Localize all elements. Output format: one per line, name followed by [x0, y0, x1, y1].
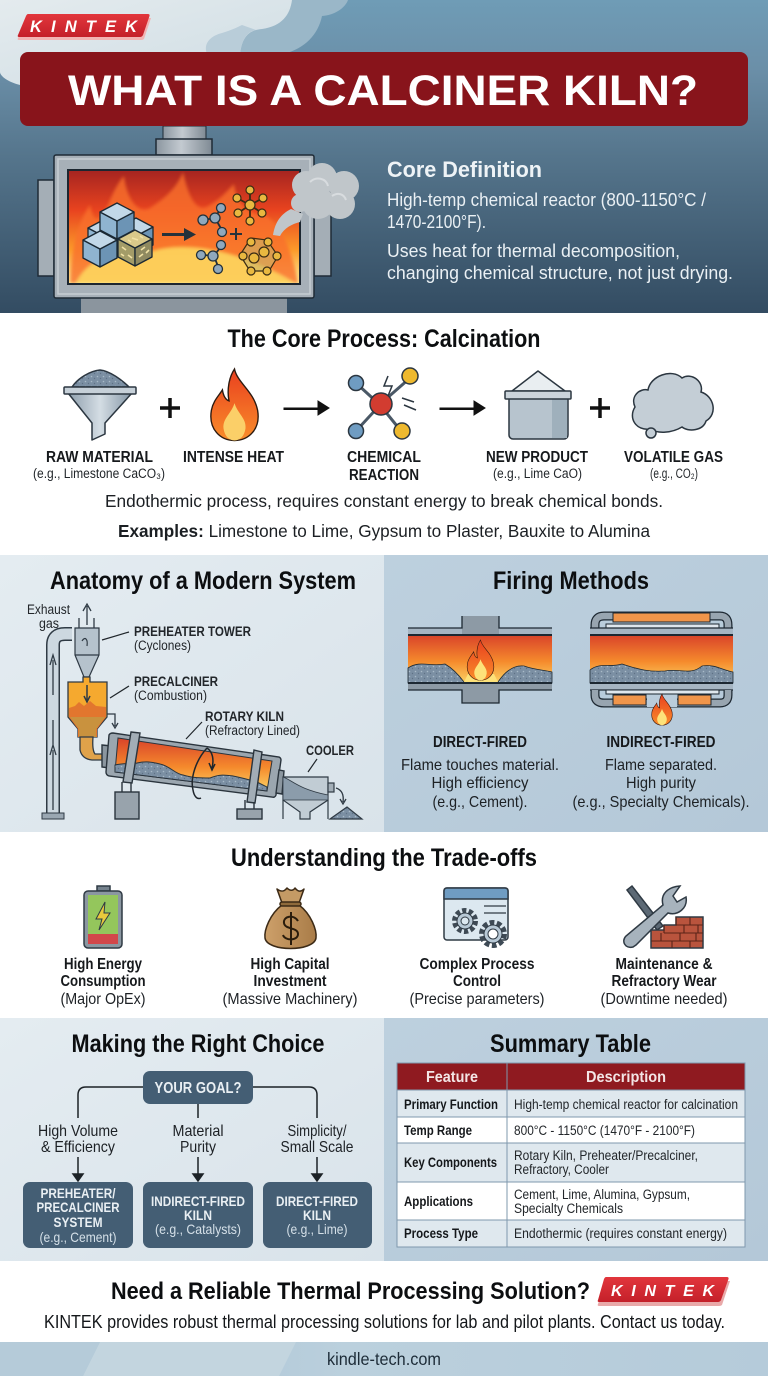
label: precalciner: (Combustion) [134, 688, 207, 703]
result: preheater: PREHEATER/ [40, 1185, 116, 1201]
table: Specialty Chemicals [514, 1201, 623, 1216]
heading: summary table: Summary Table [490, 1030, 651, 1058]
title banner: WHAT IS A CALCINER KILN? [68, 67, 698, 115]
result: preheater: PRECALCINER [36, 1199, 120, 1215]
label: cooler: COOLER [306, 743, 354, 758]
table [397, 1063, 745, 1247]
result: direct: (e.g., Lime) [286, 1221, 348, 1237]
label: volatile gas: VOLATILE GAS [624, 449, 723, 466]
arrow [440, 401, 485, 415]
table: Feature [426, 1069, 478, 1086]
result: preheater [23, 1182, 133, 1248]
label: material purity: Purity [180, 1139, 216, 1156]
table: Rotary Kiln, Preheater/Precalciner, [514, 1148, 698, 1163]
label: high capital: Investment [254, 973, 327, 990]
result: direct: DIRECT-FIRED [276, 1193, 358, 1209]
connectors [78, 1087, 317, 1118]
panel: firing methods [384, 555, 768, 832]
diagram: rotary kiln [102, 732, 284, 819]
result: direct: KILN [303, 1207, 331, 1223]
leader lines [102, 632, 317, 772]
logo: KINTEK: KINTEK [611, 1283, 715, 1300]
label: rotary kiln: ROTARY KILN [205, 709, 284, 724]
table: Primary Function [404, 1097, 498, 1112]
icon: raw material funnel [64, 370, 136, 440]
arrows [73, 1157, 322, 1181]
label: exhaust gas [27, 602, 70, 631]
panel: trade-offs [0, 832, 768, 1018]
label: raw material: RAW MATERIAL [46, 449, 153, 466]
label: complex process: (Precise parameters) [410, 991, 544, 1008]
title banner [20, 52, 748, 126]
table: Applications [404, 1194, 473, 1209]
label: maintenance: Refractory Wear [612, 973, 716, 990]
label: simplicity: Simplicity/ [288, 1123, 347, 1140]
label: material purity: Material [172, 1123, 224, 1140]
text: endothermic note: Endothermic process, requires constant energy to break chemical bonds. [105, 491, 663, 511]
panel: footer [0, 1342, 768, 1376]
label: volatile gas [624, 449, 723, 481]
table: Key Components [404, 1155, 497, 1170]
label: high energy: Consumption [60, 973, 146, 990]
label: intense heat: INTENSE HEAT [183, 449, 284, 466]
label: high volume [38, 1123, 118, 1156]
operator: plus [160, 398, 180, 418]
result: preheater: SYSTEM [54, 1214, 102, 1230]
logo: KINTEK top [18, 14, 151, 40]
logo: KINTEK [598, 1277, 730, 1306]
result: indirect [143, 1182, 253, 1248]
table: Endothermic (requires constant energy) [514, 1226, 727, 1241]
label: new product: (e.g., Lime CaO) [493, 466, 582, 481]
heading: right choice: Making the Right Choice [72, 1030, 325, 1058]
label: complex process: Control [453, 973, 501, 990]
text block: core definition: Uses heat for thermal decomposition, [387, 241, 680, 261]
text: indirect-fired [572, 734, 750, 811]
result: indirect: INDIRECT-FIRED [151, 1193, 245, 1209]
text: examples: Examples: Limestone to Lime, Gypsum to Plaster, Bauxite to Alumina [118, 521, 650, 541]
icon: chemical reaction molecule [348, 368, 418, 439]
table: Refractory, Cooler [514, 1162, 609, 1177]
icon: new product container [505, 371, 571, 439]
label: complex process [410, 956, 544, 1008]
text: indirect-fired: High purity [626, 775, 696, 792]
icon: blue molecules [196, 204, 226, 274]
label: raw material: (e.g., Limestone CaCO₃) [33, 466, 165, 481]
text: website: kindle-tech.com [327, 1349, 441, 1369]
label: precalciner [134, 674, 218, 703]
diagram: precalciner [68, 677, 118, 760]
kiln illustration [38, 126, 359, 313]
label: new product: NEW PRODUCT [486, 449, 588, 466]
diagram: indirect-fired [590, 613, 733, 725]
diagram: exhaust pipe [42, 604, 94, 819]
label: maintenance [600, 956, 728, 1008]
result: preheater: (e.g., Cement) [40, 1229, 116, 1245]
icon: stone cubes [83, 203, 153, 267]
label: simplicity [280, 1123, 354, 1156]
text: direct-fired: High efficiency [432, 775, 528, 792]
label: material purity [172, 1123, 224, 1156]
label: exhaust gas: Exhaust [27, 602, 70, 617]
icon: tools and bricks [624, 886, 703, 948]
decision: your goal: YOUR GOAL? [154, 1080, 242, 1097]
label: maintenance: Maintenance & [616, 956, 713, 973]
result: indirect: KILN [184, 1207, 212, 1223]
icon: process arrow [162, 228, 196, 241]
label: high energy [60, 956, 146, 1008]
result: indirect: (e.g., Catalysts) [155, 1221, 241, 1237]
table: Cement, Lime, Alumina, Gypsum, [514, 1187, 690, 1202]
heading: firing methods: Firing Methods [493, 567, 649, 595]
label: high energy: High Energy [64, 956, 142, 973]
label: preheater tower [134, 624, 251, 653]
label: high capital [222, 956, 358, 1008]
label: chemical reaction: REACTION [349, 467, 419, 484]
table: Temp Range [404, 1123, 472, 1138]
text: indirect-fired: INDIRECT-FIRED [606, 734, 716, 751]
icon: smoke [273, 163, 359, 236]
heading: core process: The Core Process: Calcination [228, 325, 540, 353]
label: chemical reaction: CHEMICAL [347, 449, 421, 466]
text: indirect-fired: (e.g., Specialty Chemicals). [572, 794, 750, 811]
text block: core definition: Core Definition [387, 157, 542, 182]
arrow [284, 401, 329, 415]
label: raw material [33, 449, 165, 481]
icon: gold molecules [233, 186, 281, 275]
diagram: cooler [283, 777, 362, 819]
table: Process Type [404, 1226, 478, 1241]
label: rotary kiln: (Refractory Lined) [205, 723, 300, 738]
label: simplicity: Small Scale [280, 1139, 354, 1156]
label: preheater tower: (Cyclones) [134, 638, 191, 653]
panel: header background [0, 0, 768, 313]
diagram: direct-fired [408, 616, 552, 703]
label: high capital: High Capital [250, 956, 330, 973]
text block: core definition [387, 157, 733, 283]
label: maintenance: (Downtime needed) [600, 991, 728, 1008]
operator: plus [590, 398, 610, 418]
table: Description [586, 1069, 666, 1086]
label: volatile gas: (e.g., CO₂) [650, 466, 698, 481]
text: indirect-fired: Flame separated. [605, 757, 717, 774]
label: high energy: (Major OpEx) [60, 991, 146, 1008]
panel: anatomy [0, 555, 384, 832]
icon: gas cloud [632, 374, 713, 438]
table: High-temp chemical reactor for calcination [514, 1097, 738, 1112]
logo: KINTEK top: KINTEK [30, 18, 138, 36]
label: high volume: & Efficiency [41, 1139, 115, 1156]
heading: call to action: Need a Reliable Thermal Processing Solution? [111, 1278, 590, 1305]
text block: core definition: 1470-2100°F). [387, 212, 486, 232]
panel: call to action [0, 1261, 768, 1342]
panel: summary table [384, 1018, 768, 1261]
icon: battery [84, 886, 122, 948]
text: direct-fired [401, 734, 559, 811]
icon: process control window [444, 888, 508, 945]
label: new product [486, 449, 588, 481]
icon: money bag [265, 888, 316, 948]
heading: anatomy: Anatomy of a Modern System [50, 567, 356, 595]
diagram: preheater cyclone [75, 628, 99, 677]
table: 800°C - 1150°C (1470°F - 2100°F) [514, 1123, 695, 1138]
icon: plus [230, 228, 242, 240]
label: exhaust gas: gas [39, 616, 59, 631]
result: direct [263, 1182, 372, 1248]
icon: flame [211, 369, 258, 440]
text block: core definition: High-temp chemical reactor (800-1150°C / [387, 190, 706, 210]
label: complex process: Complex Process [420, 956, 535, 973]
label: high volume: High Volume [38, 1123, 118, 1140]
label: high capital: (Massive Machinery) [222, 991, 358, 1008]
text block: core definition: changing chemical structure, not just drying. [387, 263, 733, 283]
text: direct-fired: (e.g., Cement). [432, 794, 528, 811]
label: rotary kiln [205, 709, 300, 738]
text: direct-fired: Flame touches material. [401, 757, 559, 774]
label: chemical reaction [347, 449, 421, 484]
heading: trade-offs: Understanding the Trade-offs [231, 844, 537, 872]
label: precalciner: PRECALCINER [134, 674, 218, 689]
panel: right choice [0, 1018, 384, 1261]
text: direct-fired: DIRECT-FIRED [433, 734, 527, 751]
decision: your goal [143, 1071, 253, 1104]
label: preheater tower: PREHEATER TOWER [134, 624, 251, 639]
panel: core process [0, 313, 768, 555]
